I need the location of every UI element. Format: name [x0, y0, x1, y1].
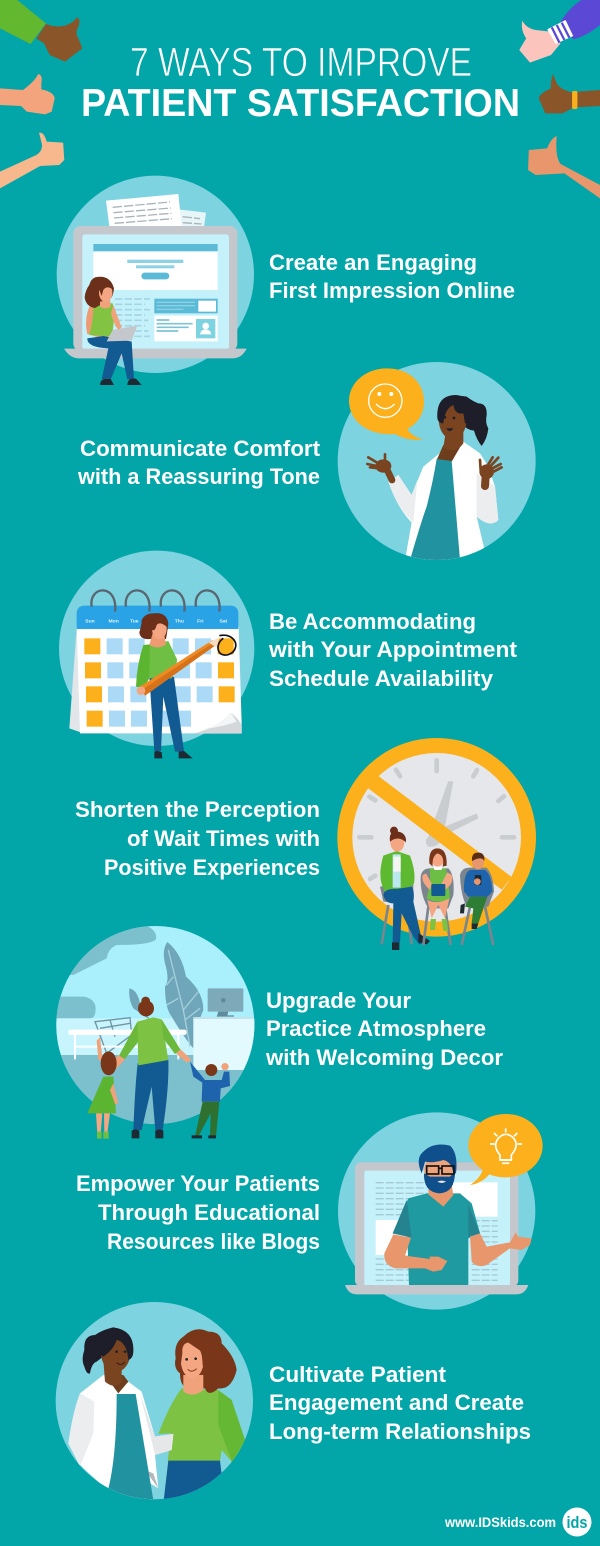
teacher man: [384, 1145, 532, 1285]
girl: [87, 1037, 118, 1139]
calendar: Mon: [109, 619, 119, 625]
heading 4: Positive Experiences: [104, 855, 320, 880]
decor room: [56, 926, 254, 1124]
mother from behind: [107, 997, 192, 1138]
heading 2: Communicate Comfort: [80, 436, 321, 461]
icon: thumb top left: [0, 0, 82, 62]
calendar: Thu: [175, 619, 184, 625]
panel 1: laptop illustration: [57, 176, 254, 385]
woman with giant pencil: [136, 613, 236, 758]
footer website and logo: [444, 1508, 592, 1536]
icon: thumb lower left: [0, 133, 64, 188]
panel 6: educational resources: [338, 1112, 543, 1310]
boy: [190, 1062, 230, 1138]
heading 5: Upgrade Your: [266, 988, 411, 1013]
panel 4: clock and waiting room: [337, 738, 536, 950]
title: [81, 39, 520, 125]
heading 5: with Welcoming Decor: [265, 1045, 503, 1070]
heading 7: Engagement and Create: [269, 1390, 524, 1415]
panel 7: patient engagement: [56, 1302, 253, 1507]
heading 2: [77, 436, 321, 489]
woman with laptop: [85, 277, 142, 385]
icon: thumb middle left: [0, 74, 55, 114]
heading 3: with Your Appointment: [268, 637, 518, 662]
heading 7: Cultivate Patient: [269, 1362, 447, 1387]
calendar: Sat: [219, 619, 228, 625]
logo: ids: ids: [566, 1513, 588, 1532]
calendar: Sun: [85, 619, 95, 625]
icon: thumb middle right: [539, 74, 600, 113]
seated boy with phone: [460, 853, 494, 945]
heading 3: Be Accommodating: [269, 609, 476, 634]
title line one: 7 WAYS TO IMPROVE: [130, 39, 472, 85]
panel 2: doctor illustration: [338, 362, 536, 560]
title line two: PATIENT SATISFACTION: [81, 82, 520, 125]
heading 7: [269, 1362, 531, 1444]
heading 5: [265, 988, 503, 1070]
icon: thumb top right: [519, 0, 600, 63]
speech bubble with lightbulb: [468, 1114, 543, 1185]
heading 5: Practice Atmosphere: [266, 1016, 486, 1041]
heading 4: [75, 797, 320, 880]
laptop: [64, 226, 247, 358]
icon: thumb lower right: [528, 136, 600, 198]
papers: [106, 194, 206, 227]
laptop with blog: [345, 1162, 528, 1294]
heading 6: [76, 1171, 320, 1254]
prohibited clock: [337, 738, 536, 937]
heading 4: Shorten the Perception: [75, 797, 320, 822]
heading 3: Schedule Availability: [269, 666, 494, 691]
heading 7: Long-term Relationships: [269, 1419, 531, 1444]
calendar: [69, 590, 242, 734]
logo: ids: [562, 1508, 592, 1536]
patient woman: [158, 1329, 245, 1503]
website url: www.IDSkids.com: [444, 1514, 556, 1530]
panel 3: calendar illustration: [59, 551, 254, 758]
heading 1: First Impression Online: [269, 278, 515, 303]
heading 6: Through Educational: [98, 1200, 320, 1225]
heading 2: with a Reassuring Tone: [77, 464, 320, 489]
speech bubble with smiley: [349, 368, 424, 440]
heading 1: Create an Engaging: [269, 250, 477, 275]
panel 5: practice atmosphere: [50, 920, 263, 1139]
doctor: [68, 1327, 173, 1507]
calendar: Fri: [197, 619, 204, 625]
seated woman with coffee: [380, 827, 430, 950]
heading 4: of Wait Times with: [127, 826, 320, 851]
calendar: Tue: [130, 619, 139, 625]
heading 1: [269, 250, 515, 303]
heading 3: [268, 609, 518, 691]
doctor: [367, 395, 502, 560]
heading 6: Resources like Blogs: [107, 1229, 320, 1254]
seated girl with book: [421, 848, 454, 945]
thumbs up hands around the title: [0, 0, 600, 198]
heading 6: Empower Your Patients: [76, 1171, 320, 1196]
